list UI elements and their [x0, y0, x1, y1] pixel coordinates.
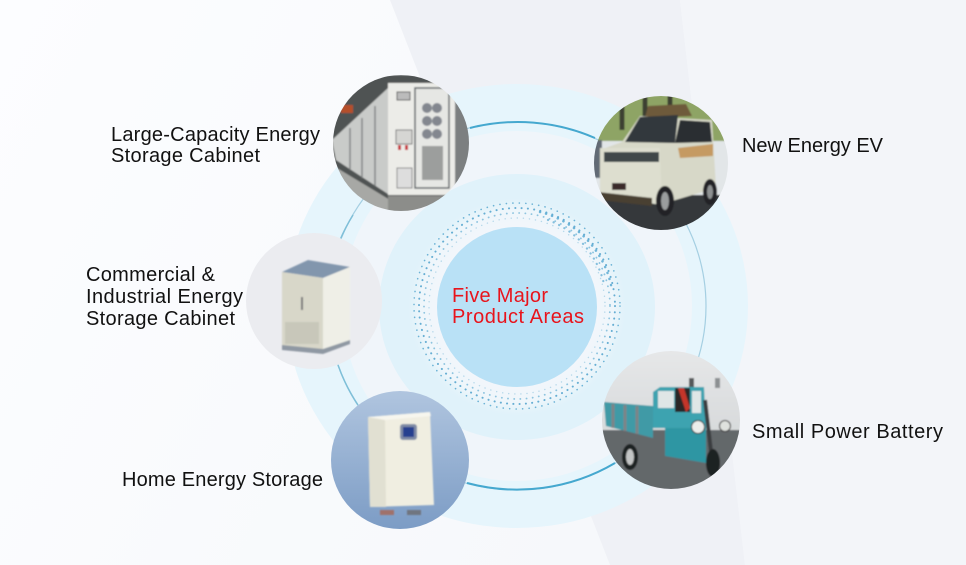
photo: EV	[590, 95, 732, 231]
center label: Product Areas	[452, 306, 584, 328]
label: commercial	[86, 264, 243, 330]
label: commercial: Commercial &	[86, 264, 216, 286]
label: new energy EV: New Energy EV	[742, 135, 884, 157]
label: small power battery: Small Power Battery	[752, 421, 943, 443]
label: large-capacity: Large-Capacity Energy	[111, 124, 320, 146]
photo: tricycle	[600, 350, 742, 490]
label: home energy storage: Home Energy Storage	[122, 469, 323, 491]
center label	[452, 285, 584, 328]
label: commercial: Storage Cabinet	[86, 308, 235, 330]
label: large-capacity: Storage Cabinet	[111, 145, 260, 167]
concentric rings	[286, 84, 748, 528]
center circle	[437, 227, 597, 387]
photo: commercial cabinet	[246, 233, 382, 369]
label: large-capacity	[111, 124, 320, 167]
photo: large-capacity cabinet	[330, 75, 472, 214]
label: commercial: Industrial Energy	[86, 286, 243, 308]
dotted halo	[407, 197, 627, 417]
center label: Five Major	[452, 285, 548, 307]
photo: home storage	[331, 391, 469, 529]
connector arcs	[338, 122, 615, 490]
